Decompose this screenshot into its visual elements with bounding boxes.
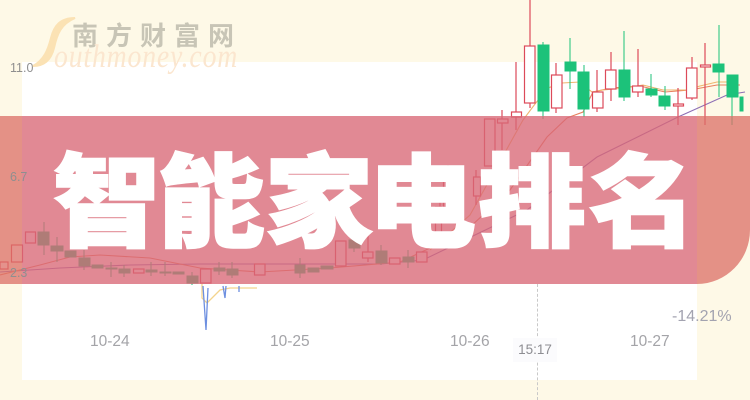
y axis labels (10, 61, 33, 280)
crosshair dashed line (537, 284, 538, 400)
band left section (0, 116, 22, 284)
band centre section (22, 116, 697, 284)
time tag: 15:17 (518, 342, 552, 357)
time tag (513, 338, 557, 362)
volume spike lines (202, 284, 257, 330)
icon: S swoosh (32, 17, 76, 67)
date 10-27: 10-27 (630, 333, 670, 350)
label 11.0: 11.0 (10, 61, 33, 75)
title: 家 (265, 121, 373, 268)
date 10-24: 10-24 (90, 333, 130, 350)
white chart panel (22, 62, 697, 380)
x axis labels (90, 308, 732, 350)
title: 智 (53, 121, 161, 268)
red hollow candles (0, 0, 710, 283)
title: 名 (589, 121, 697, 268)
green candles (38, 25, 743, 285)
band right rounded section (697, 116, 750, 284)
red title band (0, 116, 750, 284)
title: 排 (478, 121, 586, 268)
title: 能 (157, 121, 265, 268)
title: 电 (368, 121, 476, 268)
label 2.3: 2.3 (10, 266, 27, 280)
watermark logo: southmoney (32, 16, 242, 75)
brand domain: outhmoney.com (54, 39, 238, 75)
date 10-25: 10-25 (270, 333, 310, 350)
title (53, 121, 697, 268)
moving average lines (0, 82, 745, 275)
brand name Chinese: 南方财富网 (72, 16, 242, 53)
label 6.7: 6.7 (10, 170, 27, 184)
percent change: -14.21% (672, 308, 732, 325)
date 10-26: 10-26 (450, 333, 490, 350)
